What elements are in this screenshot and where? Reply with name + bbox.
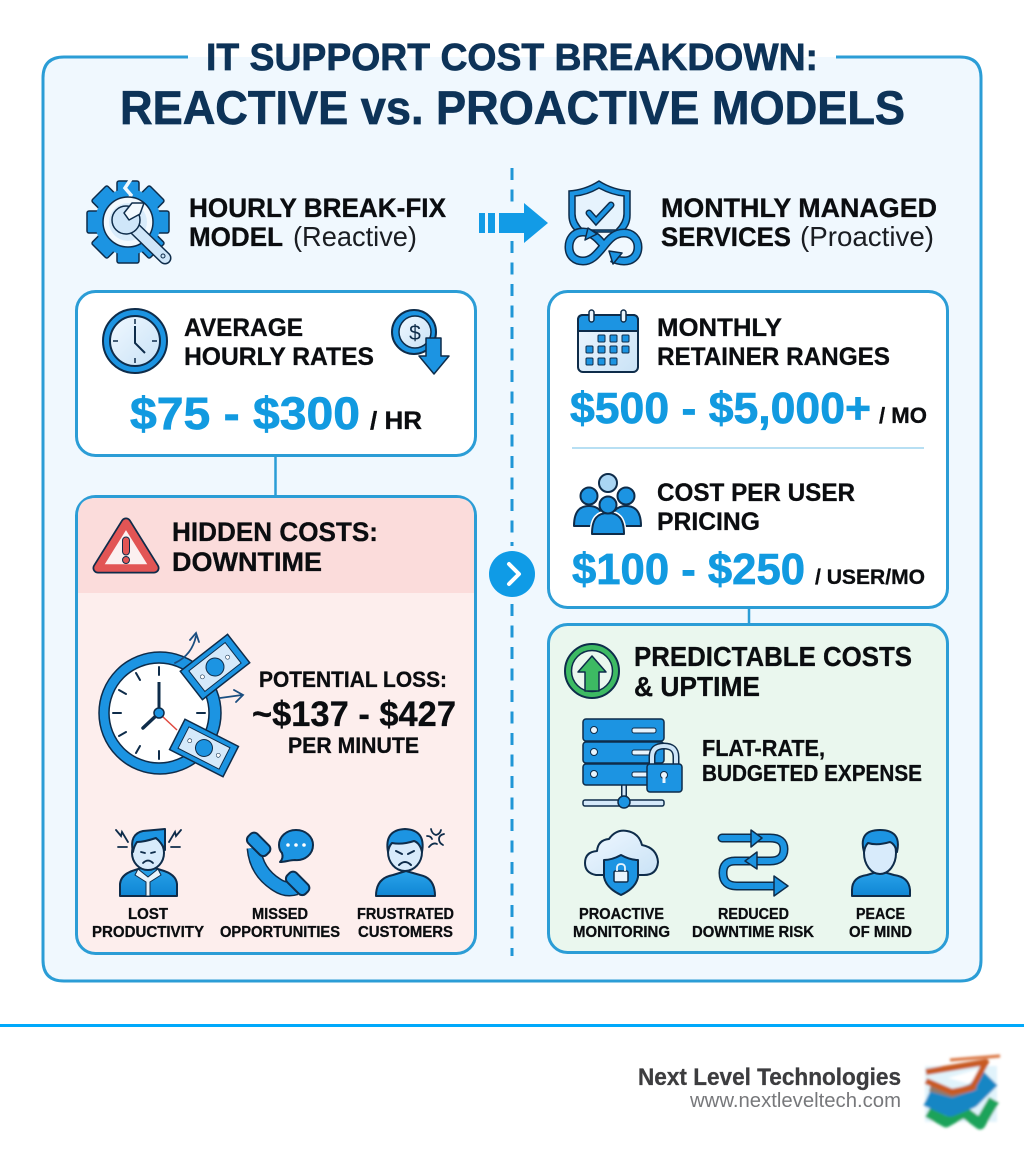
panel: monthly pricing xyxy=(548,292,948,608)
heading: monthly managed services xyxy=(661,193,937,252)
text: monthly retainer ranges xyxy=(657,314,890,371)
label: frustrated customers: CUSTOMERS xyxy=(358,924,453,941)
title: IT SUPPORT COST BREAKDOWN: xyxy=(206,37,818,79)
text: hidden costs xyxy=(172,517,378,577)
label: lost productivity: LOST xyxy=(128,906,168,923)
text: predictable costs xyxy=(634,641,912,702)
icon: calendar xyxy=(578,310,638,372)
text: average hourly rates: HOURLY RATES xyxy=(184,343,374,371)
label: missed opportunities: OPPORTUNITIES xyxy=(220,924,340,941)
label: lost productivity: PRODUCTIVITY xyxy=(92,924,204,941)
text: predictable costs: PREDICTABLE COSTS xyxy=(634,641,912,672)
panel: predictable costs and uptime xyxy=(548,624,948,952)
label: peace of mind xyxy=(849,906,912,941)
text: hidden costs: DOWNTIME xyxy=(172,547,322,577)
label: proactive monitoring: MONITORING xyxy=(573,924,670,941)
label: lost productivity xyxy=(92,906,204,941)
footer brand text xyxy=(638,1064,901,1112)
label: peace of mind: PEACE xyxy=(856,906,905,923)
text: flat-rate budgeted expense: BUDGETED EXPENSE xyxy=(702,760,922,786)
text: cost per user pricing: PRICING xyxy=(657,508,760,536)
header band xyxy=(78,498,474,593)
title: REACTIVE vs. PROACTIVE MODELS xyxy=(120,81,905,134)
label: frustrated customers: FRUSTRATED xyxy=(357,906,454,923)
unit: per month: / MO xyxy=(879,403,927,428)
label: proactive monitoring xyxy=(573,906,670,941)
text: cost per user pricing: COST PER USER xyxy=(657,479,855,507)
text: predictable costs: & UPTIME xyxy=(634,671,760,702)
text: average hourly rates: AVERAGE xyxy=(184,314,303,342)
heading: hourly break-fix model: HOURLY BREAK-FIX xyxy=(189,193,446,223)
heading: hourly break-fix model: (Reactive) xyxy=(293,221,417,252)
text: monthly retainer ranges: RETAINER RANGES xyxy=(657,343,890,371)
panel: average hourly rates xyxy=(76,292,476,456)
icon: frustrated customer xyxy=(376,829,444,896)
text: potential loss: PER MINUTE xyxy=(288,733,419,758)
text: flat-rate budgeted expense: FLAT-RATE, xyxy=(702,735,825,761)
heading: hourly break-fix model xyxy=(189,193,446,252)
icon: cracked gear and wrench xyxy=(87,179,169,263)
chevron button xyxy=(489,551,535,597)
text: flat-rate budgeted expense xyxy=(702,735,922,786)
panel: hidden costs downtime xyxy=(76,496,476,954)
icon: phone with speech bubble xyxy=(245,830,313,897)
logo xyxy=(925,1056,1000,1124)
icon: clock xyxy=(103,309,167,373)
label: frustrated customers xyxy=(357,906,454,941)
icon: shield and infinity loop xyxy=(569,181,638,264)
icon: clock losing money xyxy=(99,633,250,777)
main panel xyxy=(43,57,981,981)
footer brand text: www.nextleveltech.com xyxy=(689,1090,901,1112)
icon: person at peace xyxy=(852,830,910,896)
value: hourly price: $75 - $300 xyxy=(130,388,360,439)
label: reduced downtime risk: REDUCED xyxy=(718,906,789,923)
value: monthly retainer price: $500 - $5,000+ xyxy=(570,384,871,433)
text: hidden costs: HIDDEN COSTS: xyxy=(172,517,378,547)
text: cost per user pricing xyxy=(657,479,855,536)
text: potential loss: POTENTIAL LOSS: xyxy=(259,667,447,692)
unit: per hour: / HR xyxy=(370,407,422,435)
unit: per user per month: / USER/MO xyxy=(815,566,925,589)
label: reduced downtime risk: DOWNTIME RISK xyxy=(692,924,814,941)
text: potential loss xyxy=(252,667,456,758)
icon: dollar coin with down arrow xyxy=(392,310,449,374)
icon: server with lock xyxy=(583,719,682,808)
text: average hourly rates xyxy=(184,314,374,371)
text: potential loss: ~$137 - $427 xyxy=(252,695,456,734)
label: missed opportunities: MISSED xyxy=(252,906,308,923)
heading: hourly break-fix model: MODEL xyxy=(189,222,283,252)
icon: user group xyxy=(574,474,641,534)
label: reduced downtime risk xyxy=(692,906,814,941)
footer brand text: Next Level Technologies xyxy=(638,1064,901,1091)
label: peace of mind: OF MIND xyxy=(849,924,912,941)
connector xyxy=(274,456,277,497)
icon: dollar coin with down arrow: $ xyxy=(409,322,421,345)
icon: cloud with shield xyxy=(585,831,658,895)
icon: warning triangle xyxy=(98,523,154,568)
icon: stressed employee xyxy=(116,829,181,896)
arrow: reactive to proactive xyxy=(479,203,548,243)
heading: monthly managed services: (Proactive) xyxy=(800,221,934,252)
title xyxy=(120,37,905,134)
value: per user price: $100 - $250 xyxy=(572,545,805,594)
text: monthly retainer ranges: MONTHLY xyxy=(657,314,782,342)
heading: monthly managed services: SERVICES xyxy=(661,222,791,252)
label: proactive monitoring: PROACTIVE xyxy=(579,906,664,923)
label: missed opportunities xyxy=(220,906,340,941)
icon: green up arrow xyxy=(565,644,619,698)
heading: monthly managed services: MONTHLY MANAGED xyxy=(661,193,937,223)
icon: looping arrows xyxy=(722,830,788,896)
